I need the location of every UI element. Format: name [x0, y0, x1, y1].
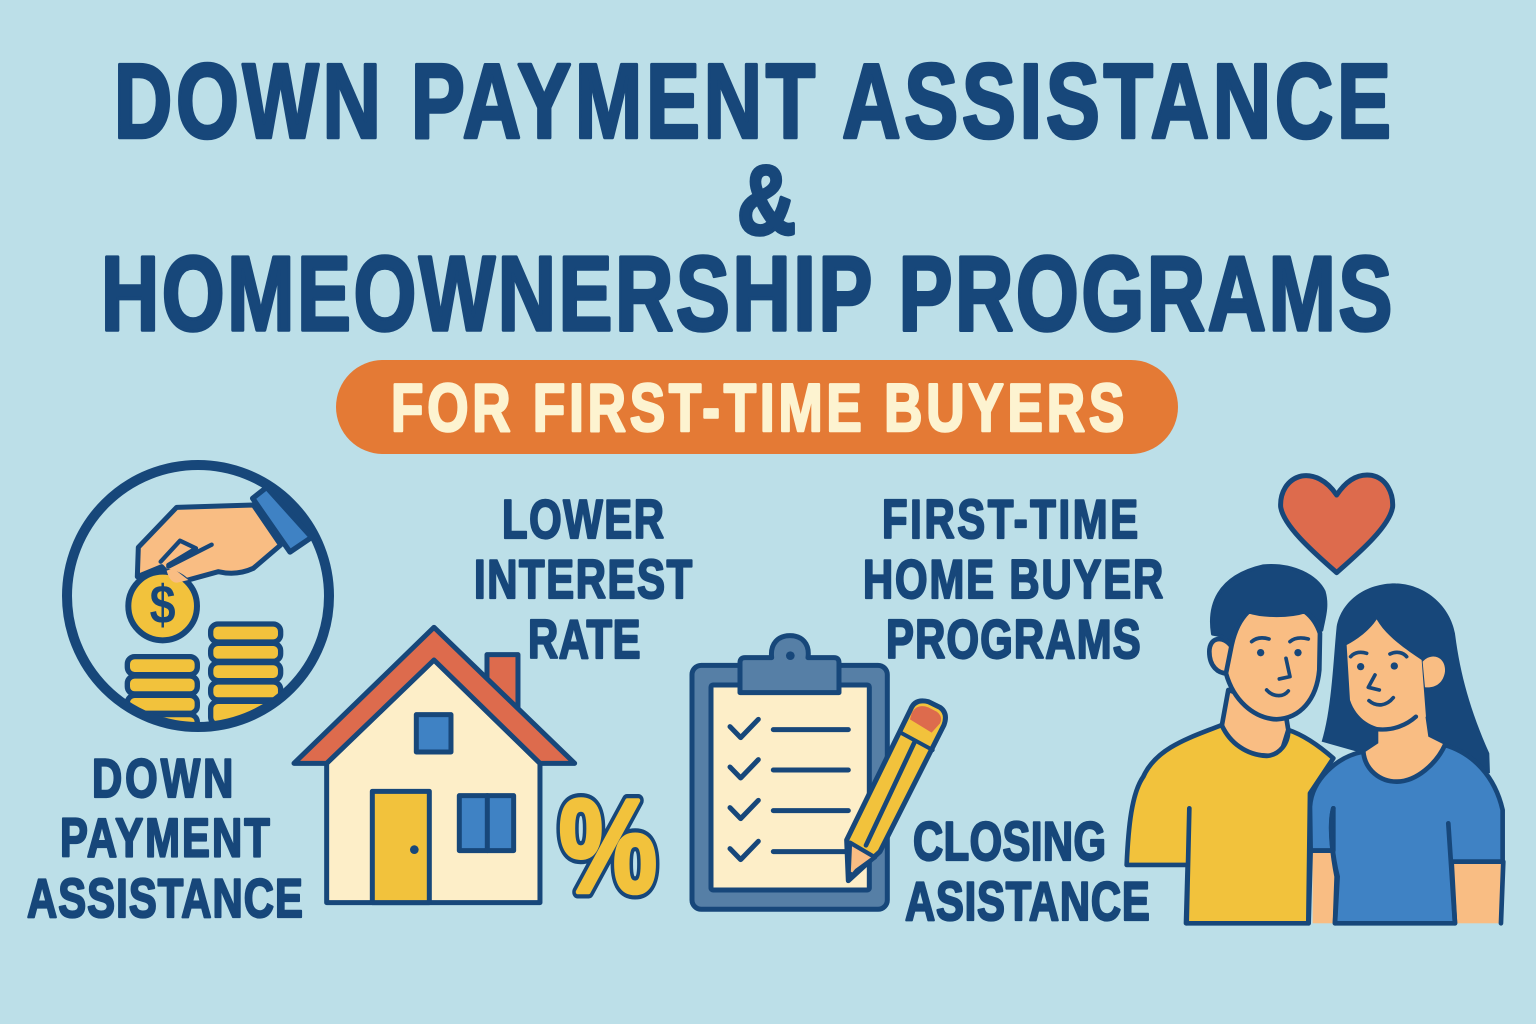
- label: first-time home buyer programs: FIRST-TIME: [882, 490, 1138, 550]
- label: lower interest rate: [474, 490, 692, 670]
- icon: heart: [1281, 475, 1393, 573]
- paper: [711, 685, 869, 890]
- door: [372, 791, 429, 903]
- label: down payment assistance: PAYMENT: [60, 808, 270, 869]
- icon: hand dropping coin into stacks: $: [150, 574, 176, 635]
- label: lower interest rate: RATE: [528, 610, 640, 670]
- title: DOWN PAYMENT ASSISTANCE: [114, 42, 1391, 160]
- coin: [128, 572, 197, 640]
- woman arms: [1313, 851, 1336, 923]
- label: down payment assistance: ASSISTANCE: [27, 869, 303, 929]
- attic window: [416, 715, 451, 752]
- icon: clipboard with pencil: [692, 636, 945, 909]
- clip: [740, 636, 839, 693]
- label: first-time home buyer programs: HOME BUYER: [863, 550, 1163, 610]
- title: HOMEOWNERSHIP PROGRAMS: [101, 234, 1392, 353]
- label: first-time home buyer programs: [863, 490, 1163, 670]
- woman shirt: [1310, 745, 1503, 923]
- house body: [327, 660, 540, 903]
- man shirt: [1127, 725, 1333, 923]
- pencil: [847, 701, 945, 881]
- woman: [1309, 619, 1503, 923]
- label: first-time home buyer programs: PROGRAMS: [886, 610, 1141, 670]
- woman neck: [1363, 713, 1445, 780]
- label: lower interest rate: INTEREST: [474, 550, 692, 610]
- cuff: [253, 487, 312, 552]
- subtitle pill: FOR FIRST-TIME BUYERS: [391, 370, 1124, 445]
- title: [101, 42, 1392, 353]
- woman features: [1351, 652, 1416, 730]
- board: [692, 665, 887, 909]
- label: down payment assistance: DOWN: [92, 749, 233, 809]
- title: &: [737, 145, 796, 255]
- front window: [459, 796, 514, 851]
- man ear: [1209, 639, 1232, 673]
- man hair: [1212, 566, 1326, 647]
- label: closing assistance: ASISTANCE: [905, 872, 1150, 932]
- label: down payment assistance: [27, 749, 303, 929]
- woman hair: [1322, 583, 1490, 773]
- chimney: [487, 655, 518, 711]
- man: [1127, 566, 1333, 923]
- ring: [67, 465, 329, 727]
- icon: percent sign: %: [559, 773, 657, 921]
- checklist: [730, 719, 848, 860]
- icon: hand dropping coin into stacks: [67, 465, 329, 733]
- icon: percent sign: %: [559, 773, 657, 921]
- label: closing assistance: [905, 812, 1150, 932]
- woman face: [1347, 619, 1426, 729]
- label: closing assistance: CLOSING: [913, 812, 1106, 872]
- man face: [1226, 612, 1320, 719]
- hand: [137, 505, 281, 583]
- label: lower interest rate: LOWER: [502, 490, 664, 550]
- man features: [1252, 638, 1308, 696]
- man neck: [1222, 690, 1288, 757]
- icon: house: [294, 627, 575, 903]
- roof: [294, 627, 575, 763]
- illustration: couple: [1127, 566, 1503, 923]
- coin stacks: [127, 624, 281, 733]
- woman ear: [1423, 656, 1445, 687]
